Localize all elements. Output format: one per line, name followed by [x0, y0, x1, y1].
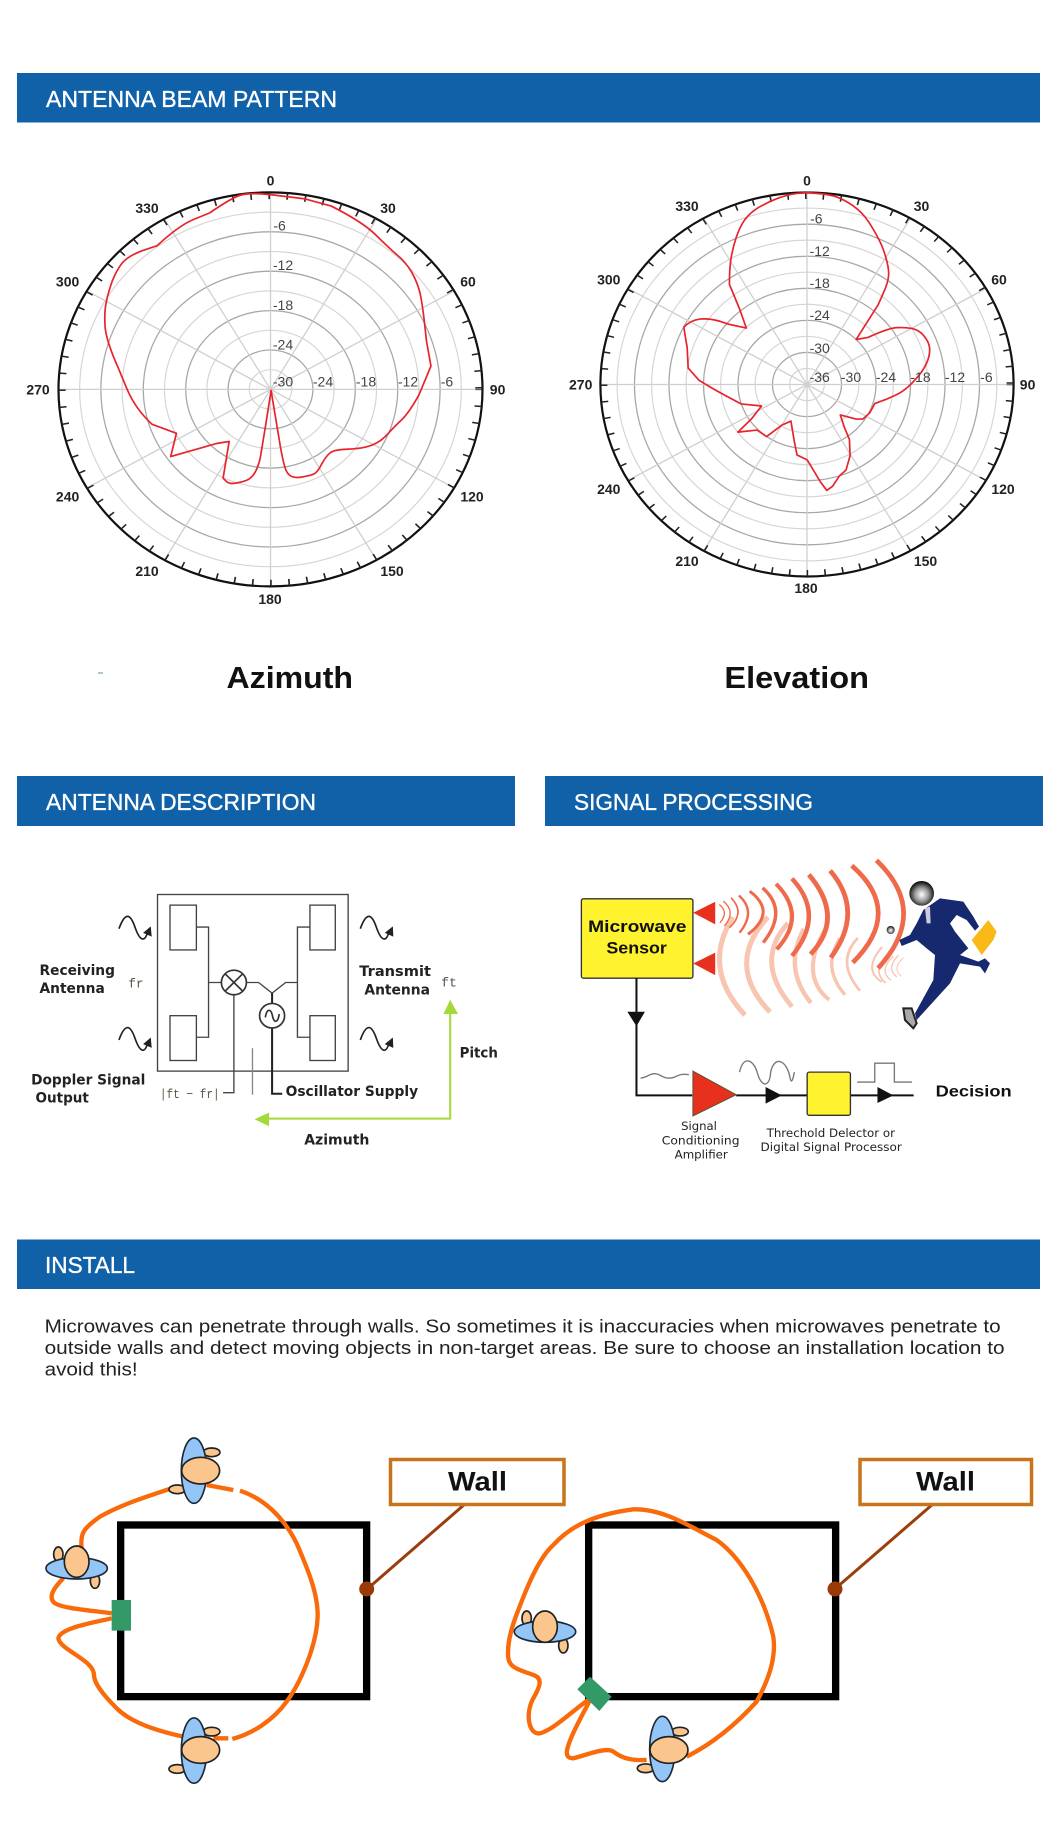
heading: install: INSTALL: [45, 1252, 135, 1278]
elevation decibel labels: -18: [910, 369, 931, 385]
wall callout: left: [359, 1460, 564, 1596]
room walls: [121, 1525, 367, 1697]
elevation angle labels: 60: [991, 272, 1007, 288]
label: decision: Decision: [936, 1083, 1012, 1100]
diagram: microwave sensor signal chain: [581, 860, 1012, 1161]
signal path lines: [636, 978, 914, 1095]
panel: antenna beam pattern: [17, 73, 1040, 695]
panel: install: [17, 1240, 1040, 1783]
elevation angle labels: 330: [675, 198, 699, 214]
azimuth angle labels: 60: [460, 274, 476, 290]
diagram: doppler antenna module: [31, 894, 498, 1148]
icon: running businessman: [887, 881, 997, 1028]
azimuth decibel labels: -12: [273, 257, 293, 273]
azimuth decibel labels: -24: [273, 336, 293, 352]
azimuth angle labels: 120: [460, 489, 484, 505]
heading: antenna description: [17, 776, 515, 826]
label: doppler signal output: Output: [35, 1091, 89, 1107]
azimuth decibel labels: -12: [398, 374, 418, 390]
elevation decibel labels: -30: [841, 369, 861, 385]
label: oscillator supply: Oscillator Supply: [286, 1084, 418, 1100]
label: receiving antenna: fr: [128, 978, 144, 992]
horn antennas: [693, 902, 715, 975]
label: threshold detector: Threchold Delector or: [766, 1126, 895, 1140]
text block: install advice: [45, 1316, 1005, 1380]
flow arrowheads: [627, 1012, 893, 1104]
elevation angle labels: 210: [675, 553, 699, 569]
wall callout: right: Wall: [916, 1466, 975, 1496]
amplifier triangle: [693, 1071, 736, 1116]
label: transmit antenna: Antenna: [364, 983, 430, 998]
elevation angle labels: [569, 172, 1036, 596]
diagram: wall mounted sensor coverage: [46, 1438, 367, 1783]
heading: antenna beam pattern: ANTENNA BEAM PATTERN: [46, 86, 337, 112]
text block: install advice: Microwaves can penetrate through walls. So sometimes it is inaccuracies when microwaves penetrate to: [45, 1316, 1001, 1337]
panel: antenna description: [17, 776, 515, 1148]
label: signal conditioning amplifier: Signal: [681, 1119, 717, 1133]
azimuth angle labels: 180: [258, 591, 282, 607]
chart title: azimuth: Azimuth: [226, 660, 353, 695]
label: azimuth: Azimuth: [304, 1133, 369, 1148]
label: receiving antenna: [40, 963, 144, 997]
azimuth angle labels: 150: [380, 563, 404, 579]
azimuth decibel labels: -6: [273, 217, 286, 233]
coverage curve: [508, 1509, 774, 1760]
azimuth angle labels: 330: [135, 200, 159, 216]
elevation angle labels: 30: [914, 198, 929, 214]
elevation decibel labels: -12: [810, 243, 830, 259]
microwave sensor box: [581, 899, 693, 978]
microwave sensor box: Sensor: [606, 938, 667, 957]
diagram: corner mounted sensor coverage: [508, 1509, 836, 1782]
person: bottom: [637, 1716, 688, 1782]
elevation angle labels: 240: [597, 481, 621, 497]
elevation angle labels: 90: [1020, 376, 1036, 392]
label: transmit antenna: [359, 964, 457, 998]
azimuth angle labels: 300: [56, 274, 79, 290]
person: top: [169, 1438, 220, 1503]
sensor: [577, 1677, 612, 1711]
chart title: elevation: Elevation: [724, 660, 869, 695]
azimuth angle labels: 240: [56, 489, 79, 505]
wall callout: left: Wall: [448, 1466, 507, 1496]
microwave sensor box: Microwave: [588, 917, 686, 936]
azimuth decibel labels: -24: [313, 374, 333, 390]
azimuth angle labels: 210: [135, 563, 159, 579]
elevation angle labels: 150: [914, 553, 937, 569]
azimuth decibel labels: -18: [273, 297, 293, 313]
elevation angle labels: 300: [597, 272, 621, 288]
threshold detector box: [807, 1072, 850, 1115]
azimuth decibel labels: -30: [273, 374, 293, 390]
text block: install advice: outside walls and detect moving objects in non-target areas. Be sure to choose an installation location to: [45, 1337, 1005, 1358]
azimuth decibel labels: -6: [441, 374, 453, 390]
elevation decibel labels: -36: [810, 369, 830, 385]
person: left: [514, 1611, 576, 1653]
label: receiving antenna: Receiving: [40, 963, 115, 979]
person: bottom: [169, 1718, 220, 1783]
label: signal conditioning amplifier: [662, 1119, 740, 1161]
elevation decibel labels: -18: [810, 275, 830, 291]
azimuth decibel labels: [273, 217, 453, 390]
mixer symbol: [221, 970, 246, 995]
heading: signal processing: [545, 776, 1043, 826]
icon: sine waves: [119, 916, 392, 1050]
label: transmit antenna: Transmit: [359, 964, 431, 980]
heading: install: [17, 1240, 1040, 1289]
transmitted wave arcs: [719, 860, 904, 968]
elevation decibel labels: -30: [810, 340, 830, 356]
label: signal conditioning amplifier: Amplifier: [675, 1148, 728, 1161]
elevation angle labels: 270: [569, 376, 593, 392]
azimuth angle labels: [26, 172, 506, 607]
azimuth angle labels: 0: [267, 172, 275, 188]
elevation angle labels: 120: [991, 481, 1015, 497]
elevation decibel labels: -6: [980, 369, 993, 385]
elevation angle labels: 0: [803, 172, 811, 188]
oscillator symbol: [260, 1003, 285, 1028]
azimuth angle labels: 270: [26, 381, 50, 397]
elevation angle labels: 180: [794, 580, 818, 596]
label: pitch: Pitch: [460, 1046, 498, 1061]
room walls: [589, 1525, 836, 1697]
text block: install advice: avoid this!: [45, 1359, 138, 1380]
heading: antenna description: ANTENNA DESCRIPTION: [46, 789, 316, 815]
chart: azimuth polar plot: [26, 172, 506, 607]
reflected wave arcs: [719, 917, 903, 1015]
sensor: [112, 1600, 131, 1631]
label: receiving antenna: Antenna: [40, 981, 105, 997]
elevation decibel labels: -12: [945, 369, 965, 385]
module outline and patches: [158, 894, 348, 1095]
heading: antenna beam pattern: [17, 73, 1040, 122]
label: doppler signal output: |ft − fr|: [160, 1088, 220, 1103]
chart: elevation polar plot: [569, 172, 1036, 596]
elevation decibel labels: -24: [876, 369, 896, 385]
person: left: [46, 1546, 107, 1588]
azimuth angle labels: 30: [380, 200, 396, 216]
elevation decibel labels: [810, 210, 993, 385]
elevation decibel labels: -6: [810, 210, 823, 226]
label: threshold detector: [761, 1126, 902, 1154]
panel: signal processing: [545, 776, 1043, 1161]
label: doppler signal output: Doppler Signal: [31, 1073, 145, 1088]
wall callout: right: [828, 1460, 1032, 1596]
heading: signal processing: SIGNAL PROCESSING: [574, 789, 813, 815]
elevation response curve: [684, 193, 930, 490]
azimuth decibel labels: -18: [356, 374, 376, 390]
label: threshold detector: Digital Signal Processor: [761, 1140, 902, 1154]
azimuth response curve: [105, 194, 431, 483]
label: transmit antenna: ft: [441, 977, 457, 991]
label: signal conditioning amplifier: Conditioning: [662, 1134, 740, 1147]
elevation decibel labels: -24: [810, 307, 830, 323]
coverage curve: [52, 1485, 318, 1739]
waveforms: [641, 1061, 912, 1084]
arrow: pitch and azimuth axes: [255, 1000, 458, 1126]
azimuth angle labels: 90: [490, 381, 506, 397]
label: doppler signal output: [31, 1073, 220, 1107]
